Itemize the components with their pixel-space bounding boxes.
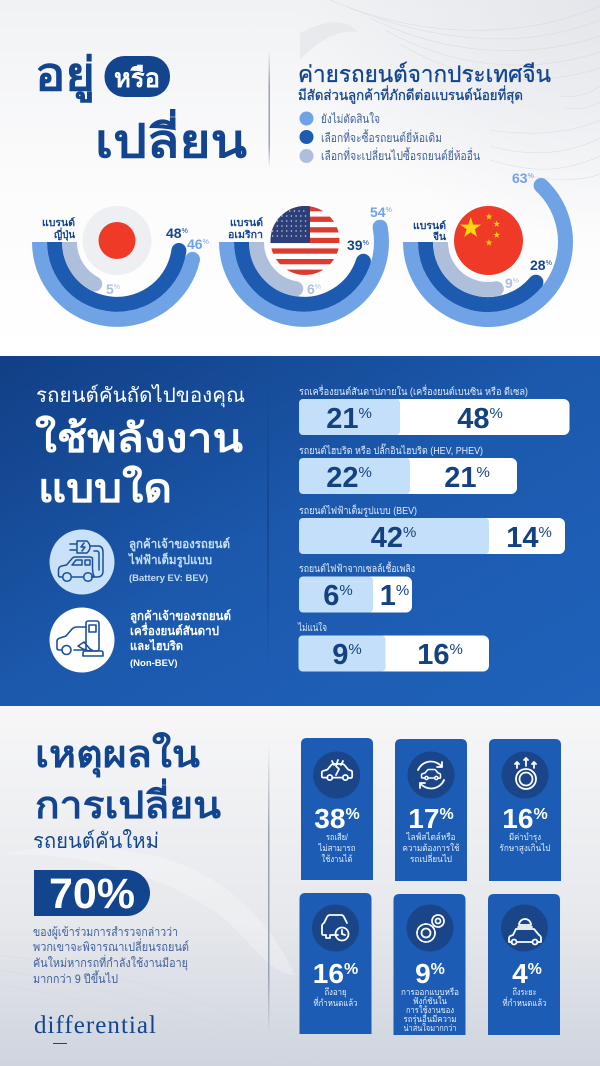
- text: 9% description: น่าสนใจมากกว่า: [404, 1023, 456, 1033]
- card: 38%: รถเสีย/: [326, 832, 348, 842]
- card: 17%: 17: [408, 803, 439, 834]
- icon: broken car: [322, 760, 352, 780]
- chart: American brands: %: [386, 207, 392, 214]
- title: เปลี่ยน: [95, 109, 248, 167]
- card: 16% age: %: [344, 961, 358, 978]
- bar: hybrid: %: [476, 464, 490, 481]
- heading: reasons: การเปลี่ยน: [35, 778, 221, 827]
- icon: rising cost coin: [515, 758, 536, 789]
- card: 16% age: 16: [313, 958, 344, 989]
- text: 70% description: มากกว่า 9 ปีขึ้นไป: [33, 970, 118, 986]
- legend: [300, 112, 480, 163]
- flag: China: [454, 206, 523, 275]
- heading: Chinese car makers: ค่ายรถยนต์จากประเทศจีน: [298, 61, 551, 87]
- title badge: or: หรือ: [114, 63, 160, 93]
- flag: Japan: [82, 206, 152, 275]
- card: 16% age: ที่กำหนดแล้ว: [314, 996, 358, 1008]
- title: อยู่: [35, 48, 95, 103]
- chart: Japanese brands: แบรนด์: [42, 217, 75, 229]
- text: non-BEV owners: เครื่องยนต์สันดาป: [130, 622, 219, 638]
- bar chart: energy preference: [297, 384, 570, 672]
- title badge: or: [104, 56, 170, 97]
- callout: 70%: 70%: [49, 870, 135, 918]
- bar: not sure: [297, 622, 489, 672]
- text: non-BEV owners: [130, 609, 231, 669]
- card: 16% maintenance: [489, 739, 561, 881]
- chart: American brands: แบรนด์: [230, 217, 263, 229]
- card: 38%: ไม่สามารถ: [318, 843, 356, 853]
- chart: Chinese brands: %: [513, 278, 519, 285]
- text: non-BEV owners: (Non-BEV): [130, 658, 178, 669]
- chart: Japanese brands: %: [114, 284, 120, 291]
- chart: Japanese brands: 48: [166, 225, 182, 241]
- legend: ยังไม่ตัดสินใจ: [321, 112, 380, 126]
- card: 4%: [488, 894, 560, 1035]
- text: 9% description: การใช้งานของ: [406, 1005, 454, 1015]
- chart: Chinese brands: 63: [512, 170, 528, 186]
- bar: internal combustion: 48: [457, 403, 489, 435]
- bar: hybrid: รถยนต์ไฮบริด หรือ ปลั๊กอินไฮบริด (HEV, PHEV): [299, 443, 483, 457]
- legend: เลือกที่จะเปลี่ยนไปซื้อรถยนต์ยี่ห้ออื่น: [321, 147, 480, 163]
- card: 17%: %: [439, 806, 454, 823]
- card: 38%: [301, 738, 373, 880]
- bar: fuel cell: [299, 561, 415, 612]
- chart: Japanese brands: [40, 206, 209, 319]
- bar: internal combustion: 21: [326, 403, 358, 435]
- bar: hybrid: 21: [444, 462, 476, 494]
- card: 38%: 38: [314, 803, 345, 834]
- text: BEV owners: (Battery EV: BEV): [129, 573, 208, 584]
- icon: fuel car with pump: [50, 608, 114, 672]
- heading: energy type: ใช้พลังงาน: [35, 415, 243, 461]
- bar: fuel cell: 6: [323, 580, 339, 612]
- chart: Chinese brands: 9: [505, 275, 513, 291]
- icon: car with gauge: [509, 919, 541, 944]
- card: 16% maintenance: มีค่าบำรุง: [509, 832, 541, 843]
- chart: American brands: อเมริกา: [228, 229, 263, 241]
- card: 38%: %: [345, 806, 360, 823]
- bar: not sure: 16: [417, 639, 449, 671]
- heading: reasons: [33, 732, 221, 853]
- text: 70% description: คันใหม่หากรถที่กำลังใช้งานมีอายุ: [33, 954, 188, 971]
- chart: Japanese brands: ญี่ปุ่น: [54, 227, 75, 241]
- card: 17%: ความต้องการใช้: [402, 843, 460, 853]
- bar: BEV: 42: [371, 522, 403, 554]
- text: non-BEV owners: ลูกค้าเจ้าของรถยนต์: [130, 609, 231, 624]
- card: 16% maintenance: รักษาสูงเกินไป: [500, 843, 551, 854]
- chart: American brands: 39: [347, 237, 363, 253]
- card: 17%: รถเปลี่ยนไป: [410, 852, 452, 864]
- bar: hybrid: 22: [326, 462, 358, 494]
- heading: energy type: รถยนต์คันถัดไปของคุณ: [36, 384, 245, 408]
- card: 4%: ถึงระยะ: [512, 987, 537, 997]
- panel: brand loyalty: [0, 0, 600, 356]
- bar: BEV: [299, 503, 565, 554]
- chart: Chinese brands: แบรนด์: [413, 220, 446, 232]
- heading: energy type: [35, 384, 245, 511]
- text: non-BEV owners: และไฮบริด: [130, 638, 183, 653]
- chart: Chinese brands: [410, 170, 566, 319]
- flag: USA: [270, 206, 340, 276]
- bar: fuel cell: รถยนต์ไฟฟ้าจากเซลล์เชื้อเพลิง: [299, 561, 415, 575]
- text: BEV owners: ไฟฟ้าเต็มรูปแบบ: [127, 552, 212, 568]
- bar: fuel cell: %: [396, 582, 409, 599]
- chart: American brands: %: [363, 240, 369, 247]
- chart: Chinese brands: %: [546, 260, 552, 267]
- bar: fuel cell: %: [339, 582, 353, 599]
- text: 9% description: [401, 987, 459, 1033]
- heading: Chinese car makers: [298, 61, 551, 104]
- chart: Chinese brands: 28: [530, 257, 546, 273]
- card: 16% age: [300, 893, 372, 1034]
- card: 9%: %: [431, 961, 445, 978]
- heading: energy type: แบบใด: [38, 465, 172, 511]
- panel: reasons for changing car: [0, 706, 600, 1066]
- bar: BEV: %: [403, 524, 416, 541]
- bar: internal combustion: [299, 384, 570, 435]
- bar: BEV: %: [538, 524, 552, 541]
- icon: BEV car with plug: [50, 530, 114, 594]
- chart: Chinese brands: จีน: [433, 231, 446, 243]
- card: 16% maintenance: %: [533, 806, 548, 823]
- chart: Japanese brands: %: [203, 239, 209, 246]
- text: 9% description: การออกแบบหรือ: [401, 987, 459, 997]
- bar: fuel cell: 1: [380, 580, 396, 612]
- heading: reasons: เหตุผลใน: [35, 732, 200, 778]
- heading: reasons: รถยนต์คันใหม่: [33, 829, 159, 853]
- icon: car with clock: [322, 915, 348, 940]
- chart: Japanese brands: %: [182, 228, 188, 235]
- bar: internal combustion: รถเครื่องยนต์สันดาปภายใน (เครื่องยนต์เบนซิน หรือ ดีเซล): [299, 384, 528, 398]
- chart: American brands: 6: [307, 281, 315, 297]
- card: 17%: [395, 739, 467, 881]
- chart: Japanese brands: 46: [187, 236, 203, 252]
- logo: differential: differential: [34, 1012, 156, 1039]
- heading: Chinese car makers: มีสัดส่วนลูกค้าที่ภักดีต่อแบรนด์น้อยที่สุด: [298, 86, 523, 104]
- chart: Japanese brands: 5: [106, 281, 114, 297]
- card: 16% age: ถึงอายุ: [324, 987, 346, 998]
- card: 9%: [394, 894, 466, 1035]
- bar: hybrid: [299, 443, 517, 494]
- bar: not sure: %: [348, 641, 362, 658]
- text: 70% description: [33, 925, 189, 986]
- chart: Chinese brands: %: [528, 173, 534, 180]
- chart: American brands: %: [315, 284, 321, 291]
- text: 9% description: ฟังก์ชันใน: [413, 995, 447, 1006]
- text: 9% description: รถรุ่นอื่นมีความ: [404, 1012, 457, 1025]
- bar: BEV: 14: [506, 522, 538, 554]
- bar: hybrid: %: [358, 464, 372, 481]
- card: 4%: 4: [512, 958, 528, 989]
- title: [35, 48, 248, 167]
- bar: not sure: 9: [332, 639, 348, 671]
- chart: American brands: 54: [370, 204, 386, 220]
- card: 9%: 9: [415, 958, 431, 989]
- icon: car with cycle arrows: [418, 761, 444, 789]
- card: 4%: %: [528, 961, 542, 978]
- card: 38%: ใช้งานได้: [322, 854, 353, 864]
- text: 70% description: ของผู้เข้าร่วมการสำรวจกล่าวว่า: [33, 925, 178, 940]
- bar: not sure: ไม่แน่ใจ: [297, 622, 327, 634]
- card: 4%: ที่กำหนดแล้ว: [502, 996, 546, 1008]
- card: 16% maintenance: 16: [502, 803, 533, 834]
- text: BEV owners: [127, 537, 230, 584]
- panel: next car energy type: [0, 356, 600, 706]
- card: 17%: ไลฟ์สไตล์หรือ: [406, 831, 456, 842]
- chart: American brands: [226, 204, 392, 319]
- bar: internal combustion: %: [489, 405, 503, 422]
- bar: internal combustion: %: [358, 405, 372, 422]
- bar: not sure: %: [449, 641, 463, 658]
- icon: gears: [417, 915, 444, 942]
- bar: BEV: รถยนต์ไฟฟ้าเต็มรูปแบบ (BEV): [299, 503, 417, 517]
- text: 70% description: พวกเขาจะพิจารณาเปลี่ยนรถยนต์: [33, 938, 189, 954]
- legend: เลือกที่จะซื้อรถยนต์ยี่ห้อเดิม: [321, 129, 442, 145]
- text: BEV owners: ลูกค้าเจ้าของรถยนต์: [129, 537, 230, 552]
